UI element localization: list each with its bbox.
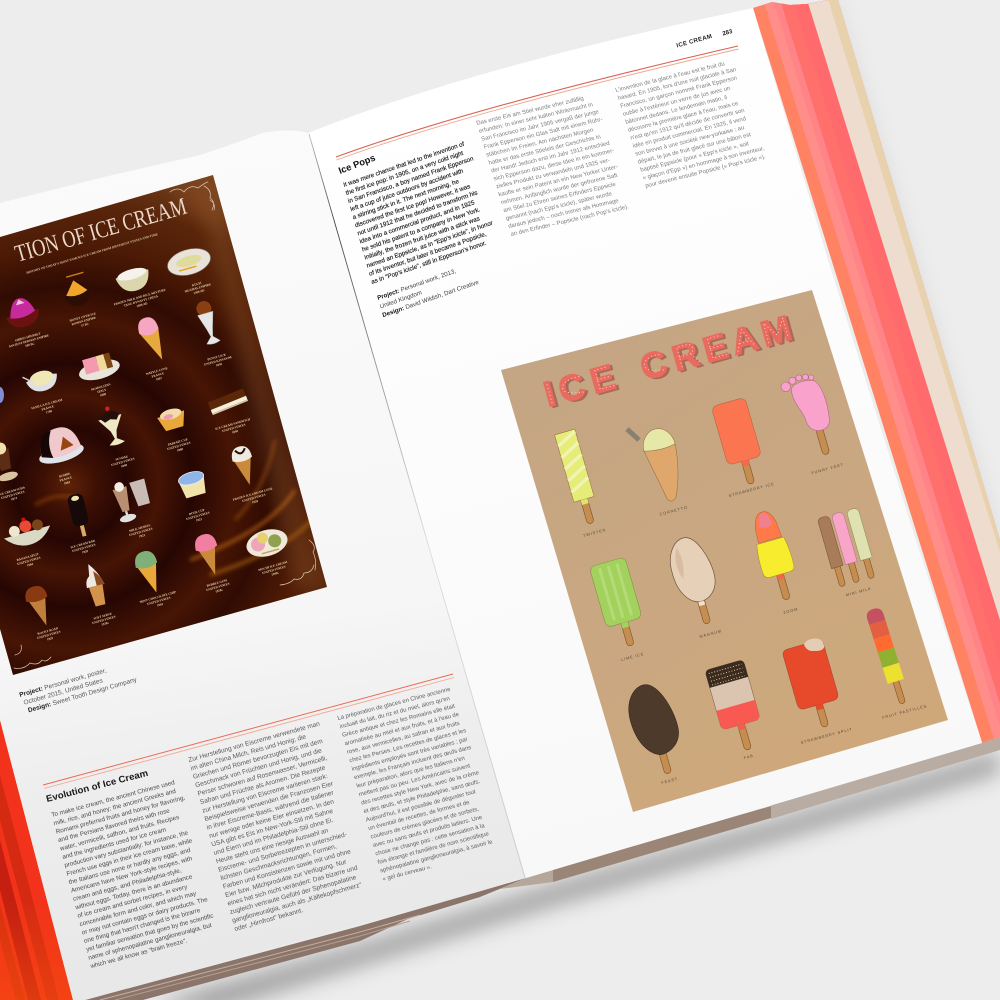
item: rocky road xyxy=(23,584,54,629)
text block: evolution english: and the ingredients used for ice cream xyxy=(62,826,167,861)
text block: evolution german: Eier bzw. Milchprodukte zur Verfügung. Nur xyxy=(224,858,348,899)
text block: evolution english: or may not contain eggs or dairy products. The xyxy=(81,896,209,937)
item: shirin sherbet xyxy=(6,298,39,328)
label: dixie cup: DIXIE CUP xyxy=(188,508,205,516)
item: ice cream bar xyxy=(68,494,88,537)
label: magnum: MAGNUM xyxy=(699,628,722,639)
label: milk shakes: MILK SHAKES xyxy=(129,523,151,533)
text block: ice pops english: idea into a commercial product, and in 1925 xyxy=(359,199,476,245)
text block: evolution german: Griechen und Römer bevorzugten Eis mit dem xyxy=(192,738,324,781)
text block: ice pops english: of its inventor, but later it became a Popsicle, xyxy=(368,231,488,278)
item: penny lick xyxy=(196,301,220,344)
label: kulfi: KULFI xyxy=(191,281,203,287)
text block: evolution english: French use eggs in their ice cream base, while xyxy=(66,837,194,878)
label: frozen milk: 1600 AD xyxy=(136,301,149,308)
caption: evolution poster credits xyxy=(19,660,138,715)
text block: ice pops german: sich Epperson dazu, diese Idee in ein kommer- xyxy=(493,148,615,182)
label: kulfi: 1500 AD xyxy=(193,288,206,295)
poster title: ice cream: A xyxy=(726,316,762,363)
text block: evolution french xyxy=(337,685,502,883)
text block: evolution french: rose, aux vermicelles, au safran et aux fruits xyxy=(346,721,461,756)
text block: ice pops german: an den Erfinder – Popsicle (nach Pop's icicle). xyxy=(510,204,630,238)
text block: evolution french: Aujourd'hui, il est possible de déguster tout xyxy=(365,789,477,824)
text block: ice pops german: daraus jedoch – noch immer als Hommage xyxy=(508,198,620,230)
item: mochi ice cream xyxy=(243,525,291,561)
label: kulfi: MUGHAL EMPIRE xyxy=(184,282,211,294)
text block: evolution german: Beispielsweise verwenden die Franzosen Eier xyxy=(204,780,335,823)
label: bombe: BOMBE xyxy=(59,472,71,479)
popsicle: strawberry ice xyxy=(711,397,768,489)
label: mint chip: UNITED STATES xyxy=(147,596,171,606)
label: shirin sherbet: ANCIENT PERSIAN EMPIRE xyxy=(8,333,49,349)
text block: ice pops french: départ, le jus de fruit glacé sur une bâton est xyxy=(637,132,752,166)
credits: ice pops: United Kingdom xyxy=(379,289,423,311)
label: penny lick: PENNY LICK xyxy=(207,352,227,362)
running header xyxy=(676,29,734,49)
item: honey over ice xyxy=(64,272,90,306)
label: lime ice: LIME ICE xyxy=(620,651,645,662)
item: ice cream soda xyxy=(0,442,18,482)
text block: ice pops english: Initially, the frozen fruit juice with a stick was xyxy=(364,215,481,262)
label: soft serve: UNITED STATES xyxy=(92,615,116,625)
text block: ice pops french: L'invention de la glace à l'eau est le fruit du xyxy=(615,61,726,94)
label: parfait cup: UNITED STATES xyxy=(167,441,191,451)
text block: ice pops german: hatte er das erste Stieleis der Geschichte in xyxy=(488,134,602,167)
poster title: ice cream: M xyxy=(759,308,799,356)
heading: evolution of ice cream: Evolution of Ice Cream xyxy=(45,768,149,804)
label: milk shakes: UNITED STATES xyxy=(129,527,153,537)
text block: evolution english: name of sphenopalatine ganglioneuralgia, but xyxy=(88,922,213,962)
item: bubble gum cone xyxy=(192,532,224,578)
text block: ice pops french: « glaçon d'Epp ») en hommage à son inventeur, xyxy=(642,146,766,182)
label: cornetto: CORNETTO xyxy=(659,504,688,517)
item: sundae xyxy=(98,406,125,446)
text block: evolution english: To make ice cream, the ancient Chinese used xyxy=(51,779,176,819)
text block: evolution english: conceivable form and color, and which may xyxy=(79,890,198,928)
label: ice cream bar: UNITED STATES xyxy=(72,543,96,553)
right page xyxy=(308,8,982,878)
label: soft serve: 1930s xyxy=(101,621,110,627)
label: strawberry split: STRAWBERRY SPLIT xyxy=(800,726,853,745)
text block: evolution english: the Italians use none or hardly any eggs, and xyxy=(68,847,192,886)
text block: ice pops french: oublie à l'extérieur un verre de jus avec un xyxy=(622,86,731,118)
popsicle: lime ice xyxy=(589,557,649,651)
label: frozen cone: UNITED STATES xyxy=(242,493,266,503)
caption: evolution poster credits: Design: Sweet Tooth Design Company xyxy=(27,676,138,714)
label: honey over ice: 37 BC xyxy=(80,322,89,328)
label: soft serve: SOFT SERVE xyxy=(93,611,112,621)
text block: evolution german: eines hat sich nicht verändert: Das bizarre und xyxy=(227,865,359,908)
text block: ice pops german: kaufte er sein Patent an ein New Yorker Unter- xyxy=(498,164,619,198)
text block: ice pops german: Das erste Eis am Stiel wurde eher zufällig xyxy=(476,96,585,127)
poster title: TION OF ICE CREAM xyxy=(12,193,190,267)
poster title: ice cream: A xyxy=(729,318,765,364)
caption: evolution poster credits: Project: Personal work, poster, xyxy=(19,667,108,699)
label: mint chip: MINT CHOCOLATE CHIP xyxy=(139,590,176,604)
label: strawberry ice: STRAWBERRY ICE xyxy=(728,481,775,498)
flourish corners xyxy=(14,182,316,668)
double rule: evolution of ice cream xyxy=(43,674,454,788)
poster title: ice cream: E xyxy=(588,357,622,403)
text block: evolution french: un éventail de recettes, de formes et de xyxy=(368,800,471,832)
poster title: ice cream: C xyxy=(636,342,672,388)
text block: evolution english: water, vermicelli, saffron, and fruits. Recipes xyxy=(58,814,180,853)
label: rocky road: UNITED STATES xyxy=(37,630,61,640)
credits: ice pops: Project: Personal work, 2013, xyxy=(377,268,457,302)
text block: evolution french: sphénopalatine ganglioneuralgia, à savoir le xyxy=(380,839,494,874)
text block: evolution english: yet familiar sensation that goes by the scientific xyxy=(85,913,214,953)
item: mint chip xyxy=(132,549,164,596)
item: soft serve xyxy=(81,561,109,607)
label: twister: TWISTER xyxy=(582,527,607,538)
popsicle: fab xyxy=(705,659,767,755)
popsicle: feast xyxy=(622,679,690,780)
text block: evolution german: Farben und Konsistenzen sowie mit und ohne xyxy=(222,848,352,891)
item: ice cream sandwich xyxy=(208,388,248,415)
running header: 283 xyxy=(722,29,734,37)
text block: ice pops french: Francisco, un garçon nommé Frank Epperson xyxy=(620,76,738,110)
text block: ice pops german: Frank Epperson ein Glas Saft mit einem Rühr- xyxy=(483,117,603,151)
right page fore-edge: pink stripes and cover xyxy=(747,0,1000,800)
text block: ice pops french xyxy=(615,58,768,190)
text block: evolution german: Perser schworen auf Rosenwasser, Vermicelli, xyxy=(197,755,328,798)
poster title: ice cream: E xyxy=(585,356,620,402)
label: sundae: SUNDAE xyxy=(115,454,128,462)
label: banana split: UNITED STATES xyxy=(17,556,41,566)
label: ice cream soda: 1874 xyxy=(10,496,18,502)
text block: ice pops german: genannt (nach Epp's icicle), später wurde xyxy=(505,191,613,222)
label: dixie cup: 1923 xyxy=(195,517,203,523)
text block: ice pops german: am Stiel zu Ehren seines Erfinders Eppsicle xyxy=(503,182,617,214)
label: milk shakes: 1922 xyxy=(138,533,146,539)
poster title: ice cream: I xyxy=(539,373,560,415)
label: funny feet: FUNNY FEET xyxy=(811,462,844,475)
label: parfait cup: PARFAIT CUP xyxy=(167,437,188,447)
poster title: ice cream: E xyxy=(698,325,732,371)
text block: evolution french: mettent pas ou peu. Les Américains suivent xyxy=(358,763,471,798)
text block: evolution french: avec ou sans œufs et produits laitiers. Une xyxy=(372,815,484,849)
label: ice cream soda: UNITED STATES xyxy=(1,490,25,500)
popsicle: zoom xyxy=(746,508,803,604)
text block: evolution german: im alten China Milch, Reis und Honig; die xyxy=(190,733,307,772)
text block: evolution english: which we all know as "brain freeze". xyxy=(89,937,188,970)
text block: evolution german: Eiscreme- und Sorbetrezepten in unterschied- xyxy=(218,831,348,874)
text block: evolution german: Heute steht uns eine riesige Auswahl an xyxy=(215,827,329,865)
running header: ICE CREAM xyxy=(676,34,713,49)
item: milk shakes xyxy=(112,478,150,522)
text block: evolution english: without eggs. Today, there is an abundance xyxy=(74,873,194,912)
item: bombe xyxy=(39,427,84,464)
label: fruit pastilles: FRUIT PASTILLES xyxy=(882,703,928,720)
label: neapolitan: NEAPOLITAN xyxy=(90,382,112,392)
label: honey over ice: ROMAN EMPIRE xyxy=(71,315,96,326)
label: bombe: FRANCE xyxy=(59,475,73,483)
text block: evolution german: USA gibt es Eis im New-York-Stil mit Sahne xyxy=(211,808,334,848)
poster title: ice cream: C xyxy=(554,364,590,411)
label: sundae: UNITED STATES xyxy=(111,457,135,467)
text block: evolution german: zugleich vertraute Gefühl der Sphenopalatine xyxy=(229,874,358,916)
text block: evolution german: Geschmack von Früchten und Honig, und die xyxy=(195,747,323,789)
text block: evolution english xyxy=(50,778,221,970)
label: waffle cone: 1807 xyxy=(155,376,163,382)
text block: ice pops german xyxy=(476,93,632,238)
item: frozen cone xyxy=(232,446,252,485)
item: frozen milk xyxy=(116,268,148,292)
text block: evolution english: Romans preferred fruits and honey for flavoring, xyxy=(55,794,186,836)
text block: ice pops french: son brevet à une société new-yorkaise ; au xyxy=(635,125,745,158)
popsicle: strawberry split xyxy=(781,636,846,732)
label: mini milk: MINI MILK xyxy=(845,586,872,597)
label: neapolitan: 1800 xyxy=(99,392,107,398)
text block: ice pops french: idée en produit commercial. En 1925, il vend xyxy=(632,116,747,150)
gutter line xyxy=(309,134,525,878)
text block: evolution german: lichsten Geschmacksrichtungen, Formen, xyxy=(220,843,338,882)
text block: evolution french: et des œufs, et style Philadelphie, sans œufs. xyxy=(363,779,481,815)
text block: evolution french: couleurs de crèmes glacées et de sorbets, xyxy=(370,807,480,841)
poster: evolution of ice cream xyxy=(0,175,327,675)
text block: evolution french: « gel du cerveau ». xyxy=(382,864,433,883)
text block: evolution german: in ihrer Eiscreme-Basis, während die Italiener xyxy=(206,789,335,832)
label: mochi ice cream: 1990s xyxy=(271,571,280,577)
label: neapolitan: ITALY xyxy=(97,387,108,394)
label: rocky road: ROCKY ROAD xyxy=(37,626,59,636)
book bottom edge: page block xyxy=(85,737,1000,1000)
text block: evolution english: one thing that hasn't changed is the bizarre xyxy=(83,907,202,945)
label: ice cream sandwich: 1899 xyxy=(231,429,239,435)
poster title: ice cream: R xyxy=(667,333,703,379)
poster glow and swirl highlights xyxy=(35,175,327,590)
poster title: ice cream: R xyxy=(670,334,706,380)
text block: ice pops french: baptisé Eppsicle (pour « Epp's icicle », soit xyxy=(640,141,750,174)
item: waffle cone xyxy=(138,317,162,360)
label: shirin sherbet: 500 BC xyxy=(25,341,35,348)
text block: evolution german xyxy=(188,720,367,933)
item: vanilla ice cream xyxy=(22,370,57,392)
label: bubble gum: BUBBLE GUM xyxy=(206,578,227,588)
text block: evolution english: Americans have New York-style recipes, with xyxy=(70,855,193,895)
text block: evolution english: production vary substantially: for instance, the xyxy=(64,829,189,869)
text block: ice pops english: a stirring stick in it. The next morning, he xyxy=(352,178,460,221)
item: kulfi xyxy=(167,248,211,276)
item: dixie cup xyxy=(178,471,206,498)
popsicle: fruit pastilles xyxy=(865,606,911,706)
text block: ice pops german: San Francisco im Jahr 1905 vergaß der junge xyxy=(481,109,600,143)
text block: ice pops french: bâtonnet dedans. Le lendemain matin, il xyxy=(625,95,728,126)
text block: evolution french: leur préparation, alors que les Italiens n'en xyxy=(356,756,466,790)
text block: ice pops french: hasard. En 1905, lors d'une nuit glaciale à San xyxy=(617,67,737,102)
text block: ice pops english: discovered the first ice pop! However, it was xyxy=(354,183,471,229)
label: penny lick: 1850 xyxy=(215,362,223,368)
label: honey over ice: HONEY OVER ICE xyxy=(69,311,96,323)
text block: ice pops english: in San Francisco, a boy named Frank Epperson xyxy=(347,155,475,205)
text block: ice pops german: zielles Produkt zu verwandeln und 1925 ver- xyxy=(495,158,611,190)
popsicle: twister xyxy=(555,429,601,526)
text block: evolution english: and the Persians flavored theirs with rose xyxy=(57,807,171,844)
poster: ice cream popsicles xyxy=(501,290,948,812)
text block: evolution english: of ice cream and sorbet recipes, in every xyxy=(77,883,189,920)
caption: evolution poster credits: October 2015, United States xyxy=(23,677,104,707)
left page fore-edge: red stripes xyxy=(0,720,73,1000)
text block: evolution french: La préparation de glaces en Chine ancienne xyxy=(337,687,452,722)
label: waffle cone: FRANCE xyxy=(151,371,165,379)
label: ice cream bar: ICE CREAM BAR xyxy=(70,538,96,549)
poster title: ice cream: E xyxy=(701,326,735,372)
label: ice cream bar: 1920 xyxy=(81,549,89,555)
text block: evolution french: chez les Perses. Les recettes de glaces et les xyxy=(349,728,467,764)
text block: evolution french: chose ne change pas : cette sensation à la xyxy=(375,823,486,857)
popsicle: funny feet xyxy=(779,370,840,461)
text block: evolution german: oder „Hirnfrost" bekannt. xyxy=(234,907,304,933)
label: fab: FAB xyxy=(743,753,754,760)
label: mint chip: 1962 xyxy=(156,602,164,608)
text block: ice pops english: as in "Pop's icicle", still in Epperson's honor. xyxy=(371,240,488,286)
text block: ice pops english: It was mere chance that led to the invention of xyxy=(343,141,465,189)
text block: evolution french: aromatisée au miel et aux fruits, et à l'eau de xyxy=(344,712,461,747)
label: sundae: 1890 xyxy=(120,463,128,469)
label: mochi ice cream: UNITED STATES xyxy=(262,565,286,575)
poster title: ice cream: C xyxy=(556,365,592,412)
poster title: ice cream xyxy=(539,306,799,416)
label: waffle cone: WAFFLE CONE xyxy=(145,366,168,376)
text block: evolution french: ingrédients employés sont très variables ; par xyxy=(351,737,468,773)
poster title: ice cream: I xyxy=(542,374,563,416)
label: ice cream sandwich: UNITED STATES xyxy=(222,423,246,433)
label: bombe: 1882 xyxy=(63,480,71,486)
label: frozen cone: 1928 xyxy=(251,499,259,505)
item: yellow cup xyxy=(157,408,184,432)
text block: ice pops french: pour devenir ensuite Popsicle (« Pop's icicle »). xyxy=(645,154,767,190)
label: vanilla ice cream: FRANCE xyxy=(41,404,55,412)
text block: evolution german: und Eiern und im Philadelphia-Stil ohne Ei. xyxy=(213,817,334,857)
label: bubble gum: UNITED STATES xyxy=(206,582,230,592)
label: dixie cup: UNITED STATES xyxy=(186,511,210,521)
item: banana split xyxy=(0,511,54,551)
text block: evolution german: ganglioneuralgia, auch als „Kältekopfschmerz" xyxy=(231,881,363,924)
label: rocky road: 1929 xyxy=(46,636,54,642)
label: feast: FEAST xyxy=(661,776,678,785)
left page xyxy=(0,130,525,1000)
text block: evolution english: milk, rice, and honey; the ancient Greeks and xyxy=(53,788,177,827)
label: frozen milk: FROZEN MILK AND RICE MIXTURE xyxy=(113,288,166,306)
credits: ice pops xyxy=(377,261,480,319)
text block: ice pops german: stäbchen im Freien. Am nächsten Morgen xyxy=(486,128,594,159)
popsicle: cornetto xyxy=(627,425,687,505)
label: shirin sherbet: SHIRIN SHERBET xyxy=(14,331,42,343)
text block: evolution french: Grèce antique et chez les Romains elle était xyxy=(342,704,456,739)
double rule: ice pops xyxy=(336,46,738,160)
label: frozen cone: FROZEN ICE CREAM CONE xyxy=(232,486,273,502)
text block: evolution french: incluait du lait, du riz et du miel, alors qu'en xyxy=(339,696,451,730)
label: zoom: ZOOM xyxy=(783,606,799,615)
text block: ice pops english: the first ice pop: in 1905, on a very cold night xyxy=(345,150,464,197)
label: frozen milk: TANG DYNASTY CHINA xyxy=(123,294,159,308)
text block: evolution german: zur Herstellung von Eiscreme variieren stark: xyxy=(201,773,329,815)
text block: ice pops french: découvre la première glace à l'eau, mais ce xyxy=(627,101,740,134)
label: vanilla ice cream: VANILLA ICE CREAM xyxy=(31,398,63,410)
popsicle: magnum xyxy=(664,532,727,629)
text block: evolution french: exemple, les Français incluent des œufs dans xyxy=(354,745,472,781)
text block: evolution german: Zur Herstellung von Eiscreme verwendete man xyxy=(188,720,321,764)
heading: ice pops: Ice Pops xyxy=(337,152,377,176)
label: bubble gum: 1950s xyxy=(215,588,224,594)
text block: ice pops english: not until 1912 that he decided to transform his xyxy=(357,189,478,237)
text block: evolution german: nur wenige oder keine Eier einsetzen. In den xyxy=(208,798,335,840)
text block: ice pops french: n'est qu'en 1912 qu'il décide de convertir son xyxy=(630,108,745,142)
text block: ice pops english: left a cup of juice outdoors by accident with xyxy=(350,167,465,213)
item: neapolitan xyxy=(79,352,120,380)
label: parfait cup: 1880 xyxy=(176,447,184,453)
text block: ice pops english: named an Eppsicle, as in "Epp's icicle", in honor xyxy=(366,220,494,270)
popsicle: mini milk xyxy=(817,507,878,588)
item: partial dish xyxy=(0,387,4,403)
label: banana split: BANANA SPLIT xyxy=(16,552,40,562)
label: vanilla ice cream: 1700 xyxy=(45,409,53,415)
text block: ice pops german: der Hand! Jedoch erst im Jahr 1912 entschied xyxy=(491,141,611,174)
text block: ice pops english xyxy=(343,139,498,286)
label: mochi ice cream: MOCHI ICE CREAM xyxy=(258,560,288,572)
text block: ice pops german: nehmen. Anfänglich wurde der gefrorene Saft xyxy=(500,173,619,206)
label: banana split: 1904 xyxy=(26,562,34,568)
poster title: ice cream: M xyxy=(756,307,796,355)
text block: evolution french: des recettes style New York, avec de la crème xyxy=(361,770,480,807)
credits: ice pops: Design: David Wildish, Dart Creative xyxy=(382,279,480,319)
poster title: ice cream: C xyxy=(638,343,674,389)
text block: evolution german: Safran und Früchte als Aromen. Die Rezepte xyxy=(199,764,327,806)
poster subtitle: HISTORY OF TODAY'S MOST FAMOUS ICE CREAM FROM DIFFERENT STATES AND TIME xyxy=(26,232,158,275)
text block: ice pops german: erfunden: In einer sehr kalten Winternacht in xyxy=(478,102,594,135)
text block: evolution french: fois étrange et familière de nom scientifique xyxy=(377,831,490,866)
text block: evolution english: cream and eggs, and Philadelphia-style, xyxy=(72,867,183,903)
label: penny lick: UNITED KINGDOM xyxy=(204,355,232,367)
text block: ice pops english: he sold his patent to a company in New York. xyxy=(361,206,481,254)
label: ice cream sandwich: ICE CREAM SANDWICH xyxy=(215,417,251,431)
